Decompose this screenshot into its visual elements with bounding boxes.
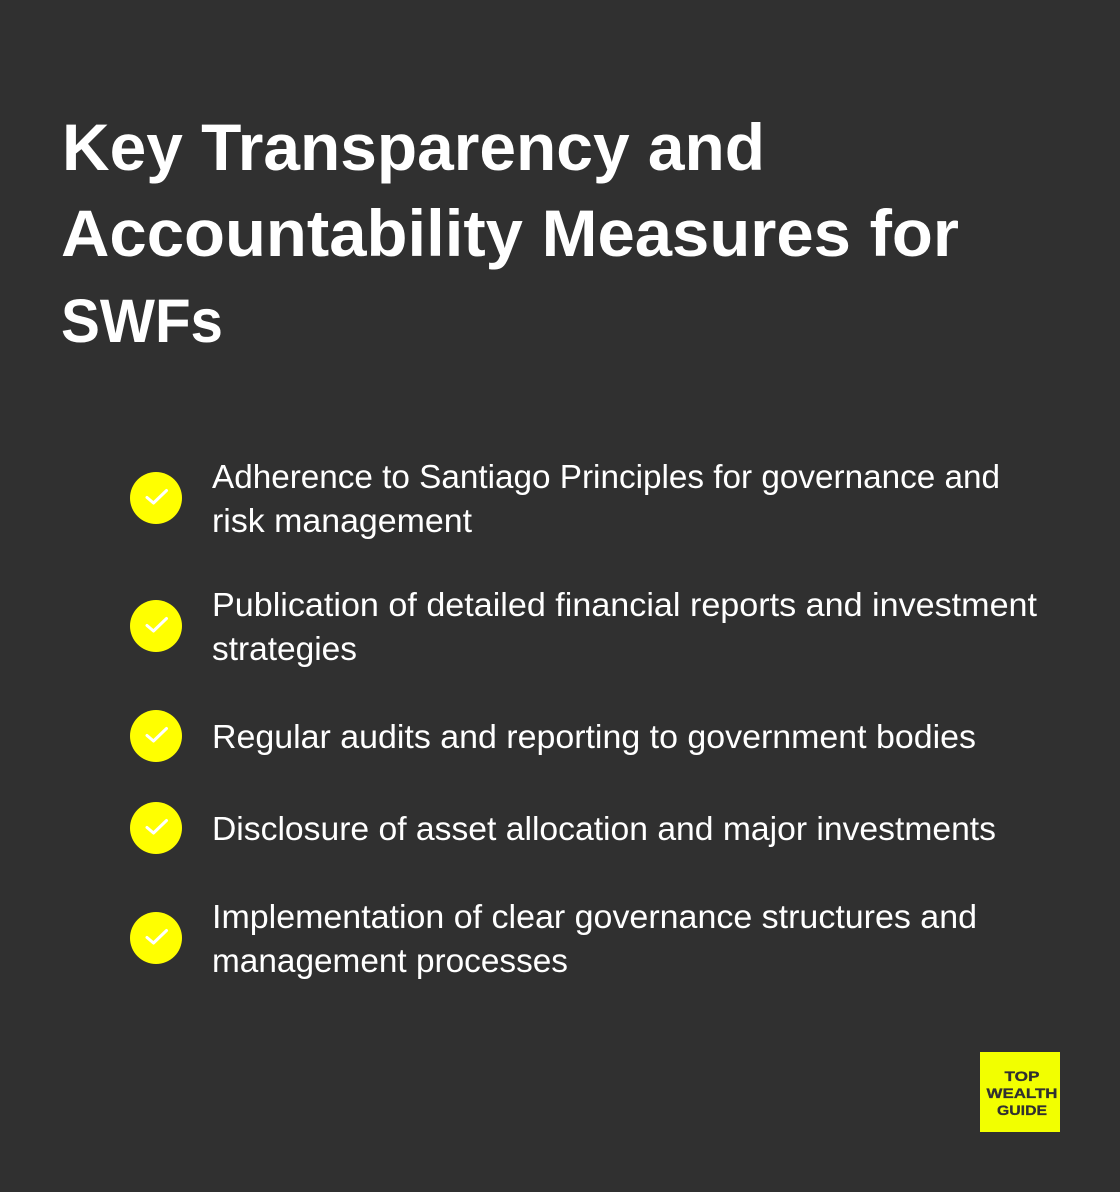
logo: Top Wealth Guide: GUIDE xyxy=(997,1102,1047,1118)
text: item 1: Adherence to Santiago Principles for governance and xyxy=(212,458,1000,495)
item 1 xyxy=(130,458,1000,539)
checklist xyxy=(130,458,1037,979)
title: Key Transparency and xyxy=(62,110,765,184)
icon: check 5 xyxy=(130,912,182,964)
text: item 1: risk management xyxy=(212,502,472,539)
text: item 2 xyxy=(212,586,1037,667)
icon: check 3 xyxy=(130,710,182,762)
text: item 2: strategies xyxy=(212,630,357,667)
icon: check 1 xyxy=(130,472,182,524)
text: item 5 xyxy=(212,898,977,979)
logo: Top Wealth Guide: WEALTH xyxy=(986,1085,1058,1101)
item 3 xyxy=(130,710,976,762)
text: item 5: management processes xyxy=(212,942,568,979)
text: item 3: Regular audits and reporting to government bodies xyxy=(212,718,976,755)
text: item 1 xyxy=(212,458,1000,539)
text: item 4: Disclosure of asset allocation and major investments xyxy=(212,810,996,847)
text: item 2: Publication of detailed financial reports and investment xyxy=(212,586,1037,623)
item 4 xyxy=(130,802,996,854)
item 5 xyxy=(130,898,977,979)
title: SWFs xyxy=(61,287,223,355)
title: Accountability Measures for xyxy=(61,196,959,270)
logo: Top Wealth Guide xyxy=(980,1052,1060,1132)
text: item 5: Implementation of clear governance structures and xyxy=(212,898,977,935)
icon: check 2 xyxy=(130,600,182,652)
icon: check 4 xyxy=(130,802,182,854)
title xyxy=(61,110,959,355)
item 2 xyxy=(130,586,1037,667)
logo: Top Wealth Guide: TOP xyxy=(1004,1068,1040,1084)
